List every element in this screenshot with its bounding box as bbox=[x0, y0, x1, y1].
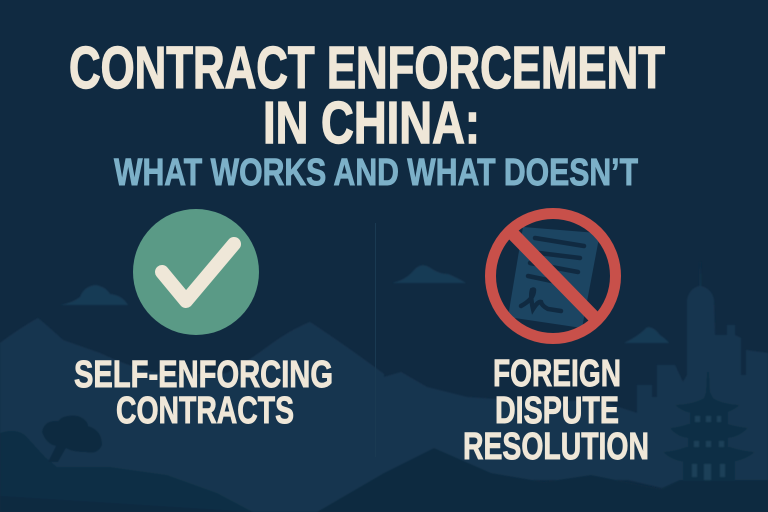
title: IN CHINA: bbox=[263, 90, 480, 156]
cloud center bbox=[392, 265, 466, 283]
document lines bbox=[521, 238, 584, 311]
tree silhouette bbox=[42, 416, 102, 462]
prohibition bar bbox=[512, 233, 595, 318]
right mountains bbox=[384, 372, 637, 480]
label: self-enforcing contracts: CONTRACTS bbox=[116, 390, 294, 432]
label: self-enforcing contracts: SELF-ENFORCING bbox=[74, 354, 333, 396]
cloud left bbox=[60, 285, 128, 305]
center divider bbox=[375, 223, 376, 457]
prohibition ring bbox=[490, 214, 616, 338]
label: foreign dispute resolution: DISPUTE bbox=[495, 390, 619, 432]
document bbox=[508, 227, 599, 328]
background scenery: mountains, clouds, tree and city bbox=[0, 262, 768, 512]
city spire bbox=[700, 262, 701, 288]
pagoda windows bbox=[692, 416, 725, 480]
left mountains bbox=[0, 318, 384, 512]
foreground band bottom bbox=[0, 448, 768, 512]
label: self-enforcing contracts bbox=[74, 354, 333, 432]
pagoda bbox=[663, 372, 755, 481]
foreground hills left bbox=[0, 431, 253, 512]
label: foreign dispute resolution: FOREIGN bbox=[493, 353, 621, 395]
icon: prohibited document bbox=[490, 214, 616, 338]
title bbox=[69, 35, 665, 156]
icon: green check bbox=[133, 209, 259, 335]
subtitle: WHAT WORKS AND WHAT DOESN’T bbox=[114, 152, 638, 194]
label: foreign dispute resolution bbox=[463, 353, 649, 468]
city skyline bbox=[620, 286, 768, 488]
label: foreign dispute resolution: RESOLUTION bbox=[463, 426, 649, 468]
cloud right bbox=[624, 327, 669, 343]
